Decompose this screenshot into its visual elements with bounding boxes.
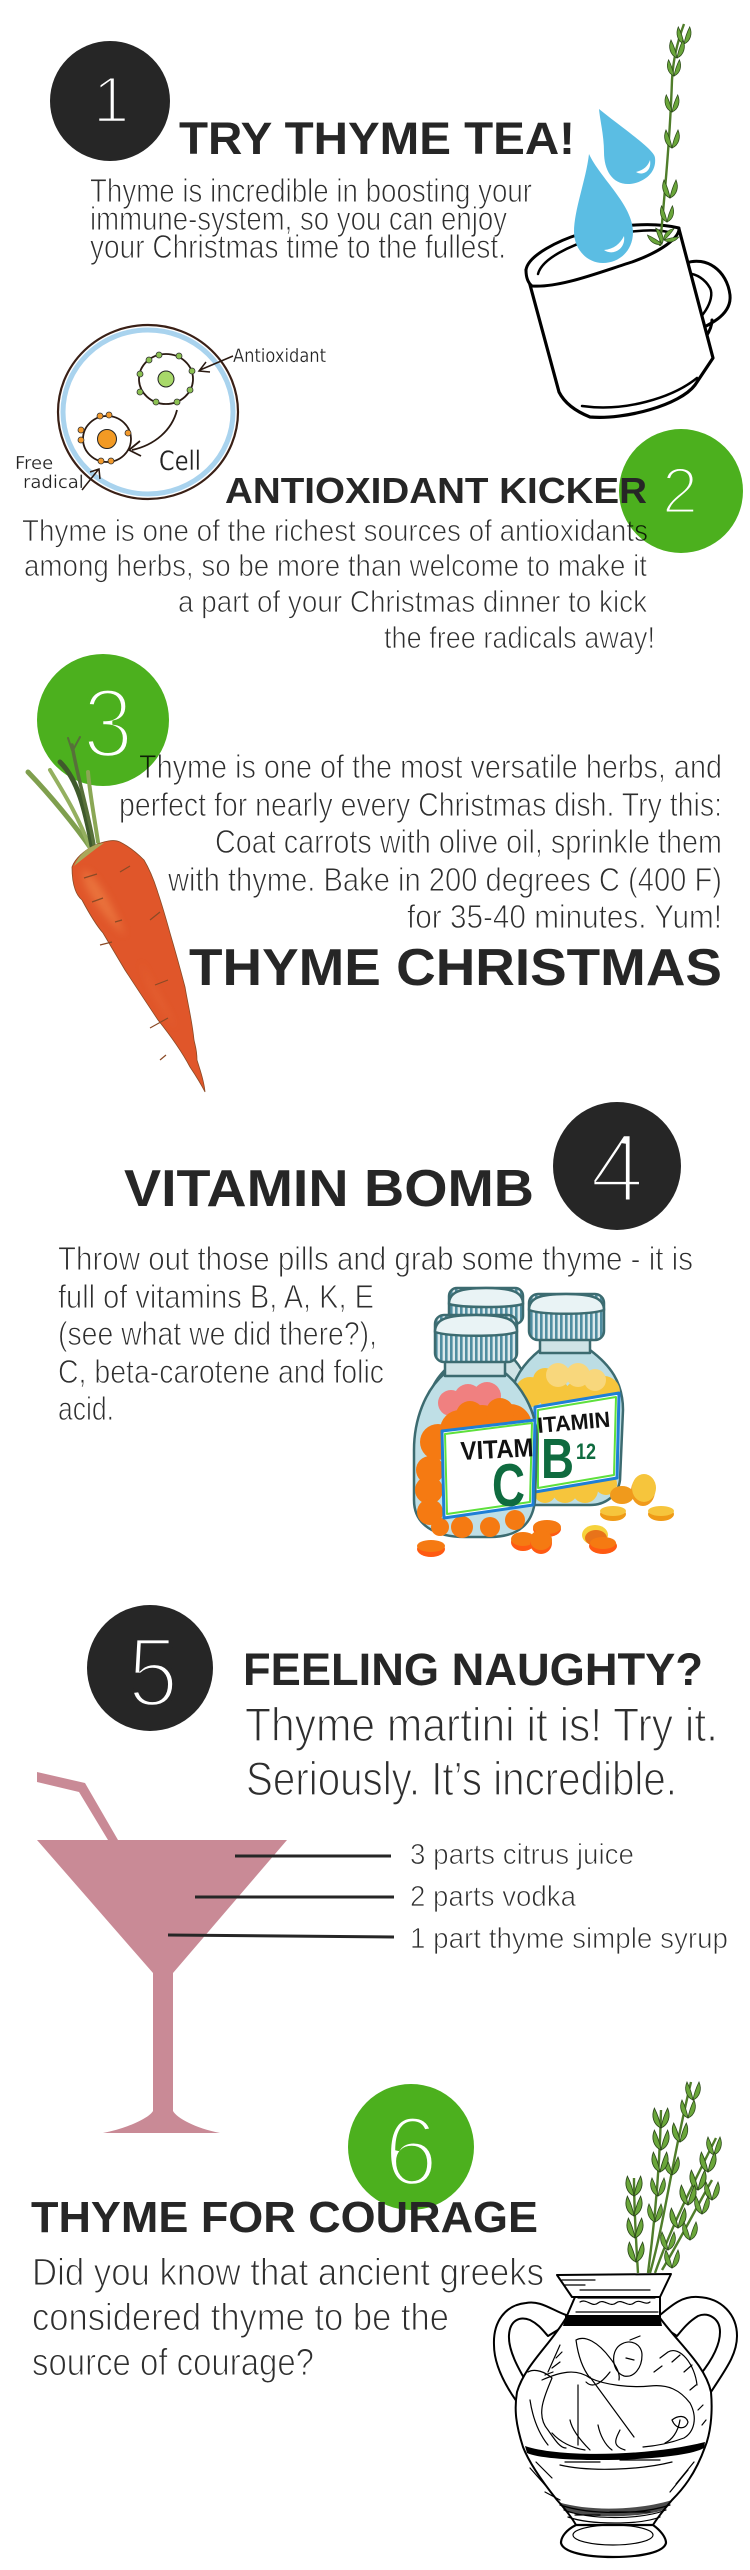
illustration: thyme bouquet [626,2082,721,2273]
text block: tip 6 body [32,2252,544,2384]
heading: thyme christmas: THYME CHRISTMAS [189,939,722,997]
icon: mug [526,225,730,417]
number badge 2: 2 [662,454,698,527]
text block: tip 1 body: your Christmas time to the fullest. [90,228,506,265]
bottle C [414,1315,537,1538]
icon: thyme sprig [647,24,691,248]
text block: tip 6 body: considered thyme to be the [32,2297,449,2339]
number badge 5 [87,1605,213,1731]
number badge 4 [553,1102,681,1230]
number badge 3: 3 [83,668,133,778]
icon: water drops [574,109,655,263]
text block: tip 2 body: Thyme is one of the richest sources of antioxidants [22,513,648,548]
label: free radical: Free [15,453,53,474]
panel: tip 1 thyme tea [50,24,730,417]
text block: tip 5 body [245,1698,718,1805]
illustration: vitamin bottles [414,1288,674,1557]
heading: feeling naughty: FEELING NAUGHTY? [243,1644,703,1695]
text block: tip 2 body [22,513,655,655]
text block: tip 4 body [58,1240,693,1427]
vase lip [557,2274,671,2297]
illustration: cell diagram [15,325,326,499]
text block: tip 4 body: (see what we did there?), [58,1315,377,1352]
free radical atom [78,412,131,464]
panel: tip 2 antioxidant [15,325,743,655]
text block: tip 1 body: Thyme is incredible in boosting your [90,172,532,209]
label: cell: Cell [159,446,201,477]
label: free radical: radical [23,472,84,493]
text block: tip 1 body: immune-system, so you can enjoy [90,200,507,237]
panel: tip 3 thyme christmas [28,654,722,1092]
panel: tip 4 vitamin bomb [58,1102,693,1557]
bottle B12: 12 [576,1439,596,1464]
arrow: free radical pointer [82,469,100,490]
text block: tip 3 body [119,748,722,935]
text block: tip 2 body: a part of your Christmas dinner to kick [178,584,647,619]
bottle C: C [492,1452,525,1519]
vase foot [561,2525,666,2557]
text block: tip 5 body: Seriously. It’s incredible. [246,1752,677,1805]
vase handles [494,2297,737,2402]
number badge 2 [619,429,743,553]
number badge 4: 4 [590,1113,644,1223]
label: citrus juice: 3 parts citrus juice [410,1839,634,1871]
number badge 1: 1 [93,63,129,136]
text block: tip 6 body: Did you know that ancient greeks [32,2252,544,2294]
number badge 1 [50,41,170,161]
panel: tip 5 feeling naughty [37,1605,728,2133]
illustration: martini glass [37,1772,287,2133]
label: vodka: 2 parts vodka [410,1881,577,1913]
number badge 6: 6 [384,2096,438,2206]
bottle B12 [511,1294,623,1505]
arrow: electron transfer [129,410,177,456]
line: citrus juice [235,1854,391,1858]
vase bands and decoration [525,2315,705,2516]
recipe lines and labels [168,1839,728,1955]
antioxidant atom [137,352,195,405]
heading: thyme for courage: THYME FOR COURAGE [31,2193,538,2242]
bottle C: VITAM [460,1432,534,1466]
text block: tip 2 body: the free radicals away! [384,620,655,655]
number badge 3 [37,654,169,786]
line: vodka [195,1896,394,1898]
text block: tip 1 body [90,172,532,265]
number badge 5: 5 [128,1617,178,1727]
text block: tip 6 body: source of courage? [32,2342,314,2384]
illustration: carrot [28,737,205,1092]
label: antioxidant: Antioxidant [233,345,326,367]
illustration: greek vase [494,2274,737,2557]
text block: tip 4 body: acid. [58,1390,114,1427]
text block: tip 2 body: among herbs, so be more than welcome to make it [24,548,647,583]
number badge 6 [348,2084,474,2210]
arrow: antioxidant pointer [199,356,233,372]
text block: tip 3 body: for 35-40 minutes. Yum! [407,898,722,935]
heading: try thyme tea: TRY THYME TEA! [179,113,575,164]
heading: vitamin bomb: VITAMIN BOMB [124,1160,534,1218]
text block: tip 4 body: full of vitamins B, A, K, E [58,1278,374,1315]
vase figure drawing [528,2280,706,2523]
label: thyme syrup: 1 part thyme simple syrup [410,1923,728,1955]
line: syrup [168,1935,394,1937]
bottle B12: ITAMIN [536,1407,611,1438]
text block: tip 4 body: C, beta-carotene and folic [58,1353,384,1390]
vase body [516,2297,712,2525]
heading: antioxidant kicker: ANTIOXIDANT KICKER [225,470,647,511]
text block: tip 4 body: Throw out those pills and grab some thyme - it is [58,1240,693,1277]
bottle B12: B [541,1427,574,1491]
loose pills [417,1474,674,1557]
back bottle [430,1288,530,1430]
panel: tip 6 courage [31,2082,737,2557]
